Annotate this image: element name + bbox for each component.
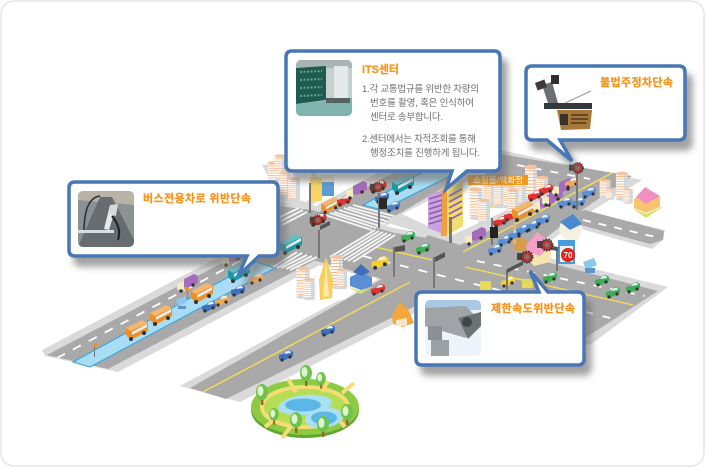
vehicles (126, 174, 640, 362)
trees (256, 365, 353, 437)
description (362, 83, 480, 159)
sidewalks (42, 130, 668, 402)
photo: parking camera and sign (535, 75, 592, 130)
callout: speed limit violation (416, 271, 584, 365)
buildings: upper left block (268, 154, 334, 201)
description: 번호를 촬영, 혹은 인식하여 (370, 97, 474, 109)
bus stop (583, 258, 597, 270)
buildings: lower block (296, 255, 374, 300)
bus lane (73, 160, 470, 367)
traffic poles and cameras (93, 163, 583, 357)
bus stop on bus lane road (176, 287, 189, 309)
buildings: central block with shopping mall (428, 165, 548, 236)
description: 행정조치를 진행하게 됩니다. (370, 147, 480, 159)
blue shop with speed sign (558, 240, 575, 264)
city block pads (385, 172, 560, 245)
orange roof house near speed callout (392, 302, 414, 327)
lane markings (57, 165, 660, 358)
description: 2.센터에서는 차적조회를 통해 (362, 133, 476, 145)
heading: 불법주정차단속 (600, 76, 673, 89)
heading: 버스전용차로 위반단속 (143, 192, 251, 205)
pond (277, 392, 344, 431)
photo: roadside camera (78, 191, 134, 247)
sign: speed limit 70: 70 (564, 251, 573, 260)
sign: speed limit 70 (561, 248, 575, 262)
sign: department store: 쇼핑몰/백화점 (473, 175, 523, 185)
heading: ITS센터 (362, 63, 399, 76)
road network (42, 130, 668, 402)
park (251, 365, 359, 438)
callout: bus lane violation (69, 182, 278, 276)
description: 센터로 송부합니다. (370, 112, 443, 123)
callout: illegal parking (526, 66, 685, 161)
photo: control room (296, 60, 352, 116)
description: 1.각 교통법규를 위반한 차량의 (362, 83, 479, 95)
road surfaces (47, 138, 664, 399)
buildings: right blocks (511, 172, 664, 273)
heading: 제한속도위반단속 (491, 301, 575, 315)
white apartment (559, 218, 583, 240)
crosswalks (273, 205, 397, 270)
callout: ITS center (286, 51, 500, 189)
department store tower (428, 182, 463, 236)
pink house and church (527, 238, 552, 266)
photo: speed camera (425, 300, 481, 356)
